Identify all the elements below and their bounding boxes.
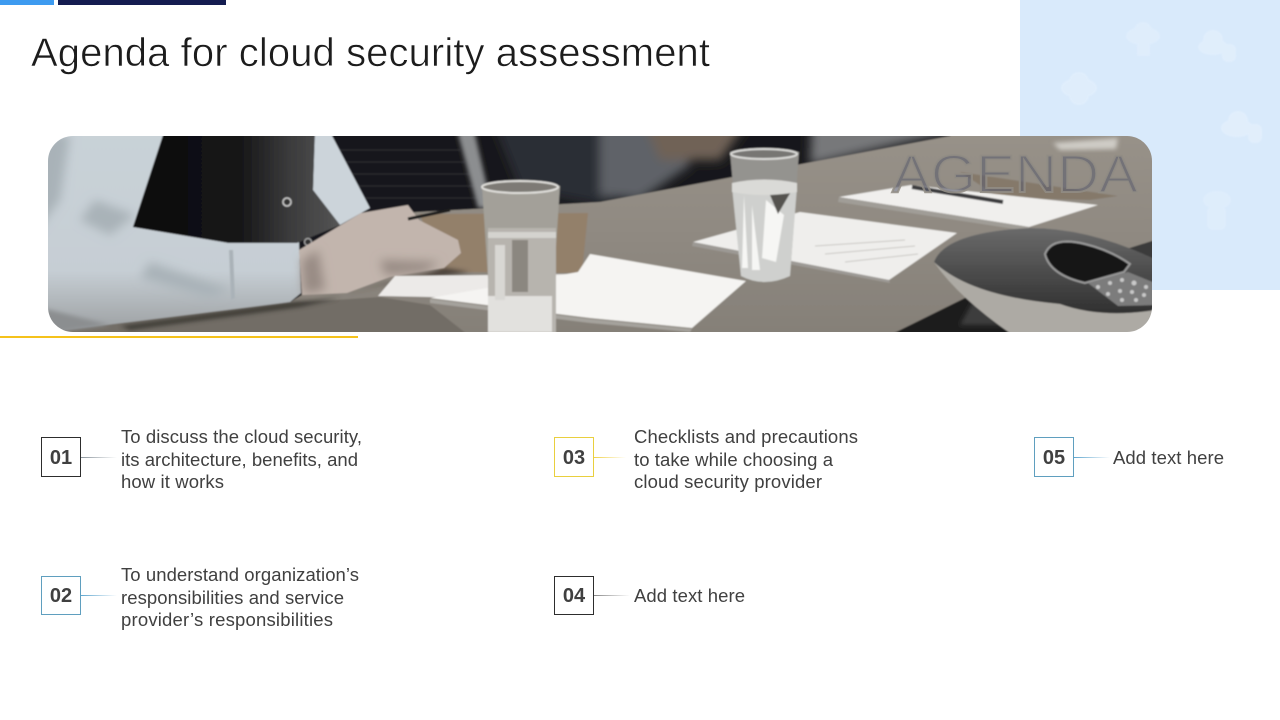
number box 02: [42, 576, 80, 614]
top accent bars: [0, 0, 226, 5]
blurred people behind the table: [496, 136, 947, 202]
number box 04: 04: [563, 585, 586, 607]
pen: [408, 210, 450, 219]
glass 2: [730, 148, 799, 282]
agenda item 02: [42, 564, 359, 630]
yellow divider line: [0, 336, 358, 338]
photo background: [133, 136, 951, 302]
agenda item 05: [1034, 438, 1224, 476]
photo: meeting room table: [48, 136, 1152, 332]
chair stripes: [330, 150, 480, 198]
conference speaker: [934, 228, 1152, 332]
icon: cloud lock top: [1198, 30, 1236, 62]
number box 02: 02: [50, 585, 72, 607]
papers: [378, 274, 578, 298]
text 01: how it works: [121, 471, 224, 492]
notepaper shadow under hand: [370, 266, 468, 288]
text 04: Add text here: [634, 585, 745, 606]
title: Agenda for cloud security assessment: [31, 31, 710, 75]
icon: cloud network: [1126, 22, 1160, 56]
text 01: its architecture, benefits, and: [121, 449, 358, 470]
icon: cloud shield: [1061, 72, 1097, 105]
panel: light blue corner with cloud security icons: [1020, 0, 1280, 290]
text 03: to take while choosing a: [634, 449, 834, 470]
glass 1: [482, 181, 560, 340]
dark corner behind speaker: [1129, 240, 1152, 259]
number box 01: 01: [50, 447, 72, 469]
center document: [693, 212, 957, 280]
agenda item 04: [554, 576, 745, 614]
table top: [169, 136, 1152, 332]
text 02: provider’s responsibilities: [121, 609, 333, 630]
agenda watermark: AGENDA: [892, 145, 1139, 204]
text 03: cloud security provider: [634, 471, 822, 492]
shirt sleeve: [48, 136, 302, 330]
top paper and folder: [1053, 138, 1118, 150]
text 02: To understand organization’s: [121, 564, 359, 585]
brown folder: [420, 213, 588, 273]
number box 03: [554, 438, 594, 476]
hand: [299, 205, 461, 295]
text 02: responsibilities and service: [121, 587, 344, 608]
text 05: Add text here: [1113, 447, 1224, 468]
agenda item 03: [554, 426, 858, 492]
number box 01: [42, 438, 80, 476]
text 03: Checklists and precautions: [634, 426, 858, 447]
camera equipment: [894, 298, 1010, 332]
icon: cloud padlock: [1203, 191, 1231, 230]
chair frame: [457, 130, 492, 208]
number box 05: 05: [1043, 447, 1065, 469]
number box 04: [554, 576, 594, 614]
icon: cloud lock right: [1221, 111, 1262, 143]
agenda item 01: [42, 426, 362, 492]
number box 05: [1034, 438, 1074, 476]
notepad: [839, 185, 1098, 227]
text 01: To discuss the cloud security,: [121, 426, 362, 447]
number box 03: 03: [563, 447, 585, 469]
vest: [134, 136, 340, 244]
